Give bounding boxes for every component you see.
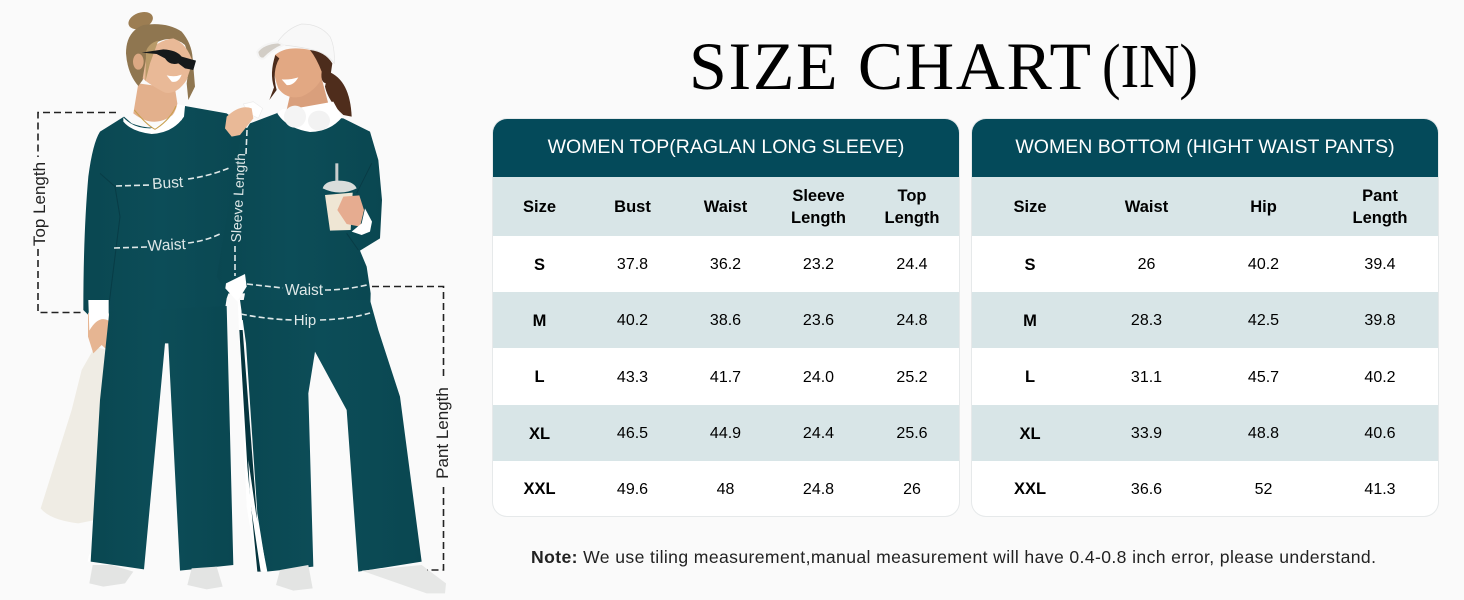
- row: L: 43.3: [617, 368, 648, 386]
- row: XL: 24.4: [803, 425, 834, 442]
- row: L: 24.0: [803, 368, 834, 386]
- row: XL: 40.6: [1364, 425, 1396, 442]
- row: M: 42.5: [1248, 312, 1279, 329]
- column headers: women top: Length: [791, 208, 846, 226]
- face: [143, 38, 193, 93]
- right woman pants: [238, 300, 267, 572]
- measurement guide: waist on pants set: Waist: [285, 282, 324, 299]
- row: S: S: [534, 256, 545, 274]
- row: S: 26: [1138, 256, 1155, 273]
- model: right woman upper body: [88, 24, 382, 320]
- title: (IN): [1102, 33, 1198, 101]
- row: XL: 33.9: [1131, 425, 1162, 442]
- measurement guide: top length: Top Length: [30, 162, 49, 246]
- column headers: women bottom: Waist: [1125, 198, 1168, 216]
- row: M: 39.8: [1364, 312, 1396, 329]
- row: L: 45.7: [1248, 368, 1279, 386]
- column headers: women bottom: Pant: [1362, 186, 1398, 204]
- row: XL: [493, 405, 959, 461]
- row: XXL: 49.6: [617, 480, 648, 498]
- row: XXL: [1014, 480, 1396, 498]
- panel: women top size table: [493, 119, 959, 516]
- column headers: women top: Sleeve: [792, 186, 845, 204]
- left woman pants: [227, 307, 236, 565]
- row: XXL: XXL: [523, 480, 556, 498]
- row: XXL: 36.6: [1131, 480, 1162, 498]
- model: left woman upper body: [83, 9, 253, 320]
- row: XL: 46.5: [617, 425, 648, 442]
- row: L: [1025, 368, 1396, 386]
- legs and accessories: [41, 300, 446, 593]
- column headers: women top: Bust: [614, 198, 651, 216]
- row: S: [534, 256, 928, 274]
- row: M: 23.6: [803, 312, 834, 329]
- table heading: women top: [493, 119, 959, 177]
- row: XL: XL: [529, 424, 550, 442]
- row: L: L: [534, 368, 545, 386]
- title: SIZE CHART: [689, 28, 1091, 104]
- row: L: 41.7: [710, 368, 741, 386]
- table heading: women bottom: [972, 119, 1438, 177]
- row: S: 36.2: [710, 256, 741, 273]
- measurement guide: pant length: [372, 286, 452, 570]
- row: L: 31.1: [1131, 368, 1162, 386]
- column headers: women top: Top: [897, 186, 926, 204]
- icon: drink cup: [323, 163, 357, 231]
- row: XXL: 26: [903, 480, 921, 498]
- measurement guide: hip: [241, 312, 370, 329]
- row: XXL: 52: [1255, 480, 1272, 498]
- column headers: women top: [493, 177, 959, 236]
- column headers: women top: Waist: [704, 198, 747, 216]
- row: XL: XL: [1019, 424, 1041, 442]
- panel: women bottom size table: [972, 119, 1438, 516]
- hat: [277, 24, 334, 63]
- face: [274, 48, 325, 97]
- measurement guide: top length: [30, 112, 116, 312]
- row: L: 25.2: [896, 368, 928, 386]
- row: M: [493, 292, 959, 348]
- row: XXL: XXL: [1014, 480, 1046, 498]
- row: S: [1024, 256, 1396, 274]
- measurement guide: waist on top: Waist: [147, 236, 187, 255]
- figures: two models with measurement guides: [30, 12, 452, 594]
- row: XXL: 48: [717, 480, 734, 498]
- row: XL: 48.8: [1248, 425, 1279, 442]
- column headers: women top: Size: [523, 198, 556, 216]
- hair: [310, 50, 332, 84]
- row: L: [534, 368, 928, 386]
- row: XXL: 41.3: [1364, 480, 1396, 498]
- row: S: 37.8: [617, 256, 648, 273]
- measurement guide: sleeve length: Sleeve Length: [228, 153, 248, 243]
- table heading: women top: WOMEN TOP(RAGLAN LONG SLEEVE): [548, 136, 904, 158]
- row: XL: [972, 405, 1438, 461]
- row: M: 28.3: [1131, 312, 1162, 329]
- column headers: women top: Length: [884, 208, 940, 226]
- column headers: women bottom: [972, 177, 1438, 236]
- hair: [126, 24, 195, 100]
- row: S: 40.2: [1248, 256, 1279, 273]
- row: S: 23.2: [803, 256, 834, 273]
- row: M: [972, 292, 1438, 348]
- neck: [287, 78, 330, 110]
- accessory: tote bag: [41, 347, 107, 523]
- row: L: 40.2: [1364, 368, 1396, 386]
- row: L: L: [1025, 368, 1035, 386]
- row: M: M: [1023, 312, 1037, 330]
- row: S: 39.4: [1364, 256, 1396, 273]
- note: Note: We use tiling measurement,manual measurement will have 0.4-0.8 inch error, please understand.: [531, 547, 1376, 567]
- table heading: women bottom: WOMEN BOTTOM (HIGHT WAIST PANTS): [1015, 136, 1395, 158]
- row: M: M: [533, 312, 546, 330]
- measurement guide: bust: Bust: [152, 174, 184, 193]
- row: M: 24.8: [896, 312, 928, 329]
- row: XXL: [523, 480, 921, 498]
- row: M: 40.2: [617, 312, 648, 329]
- measurement guide: waist on top: [114, 234, 220, 255]
- column headers: women bottom: Hip: [1250, 198, 1277, 216]
- row: XL: 44.9: [710, 425, 741, 442]
- row: M: 38.6: [710, 312, 741, 329]
- measurement guide: bust: [116, 168, 229, 193]
- column headers: women bottom: Length: [1352, 208, 1408, 226]
- measurement guide: pant length: Pant Length: [433, 387, 452, 479]
- measurement guide: waist on pants set: [247, 282, 367, 299]
- row: XL: 25.6: [896, 425, 928, 442]
- bun: [126, 9, 155, 33]
- row: S: S: [1024, 256, 1036, 274]
- shoes: [89, 565, 133, 587]
- column headers: women bottom: Size: [1013, 198, 1047, 216]
- row: XXL: 24.8: [803, 480, 834, 498]
- measurement guide: sleeve length: [228, 130, 248, 276]
- measurement guide: hip: Hip: [294, 312, 316, 329]
- row: S: 24.4: [896, 256, 928, 273]
